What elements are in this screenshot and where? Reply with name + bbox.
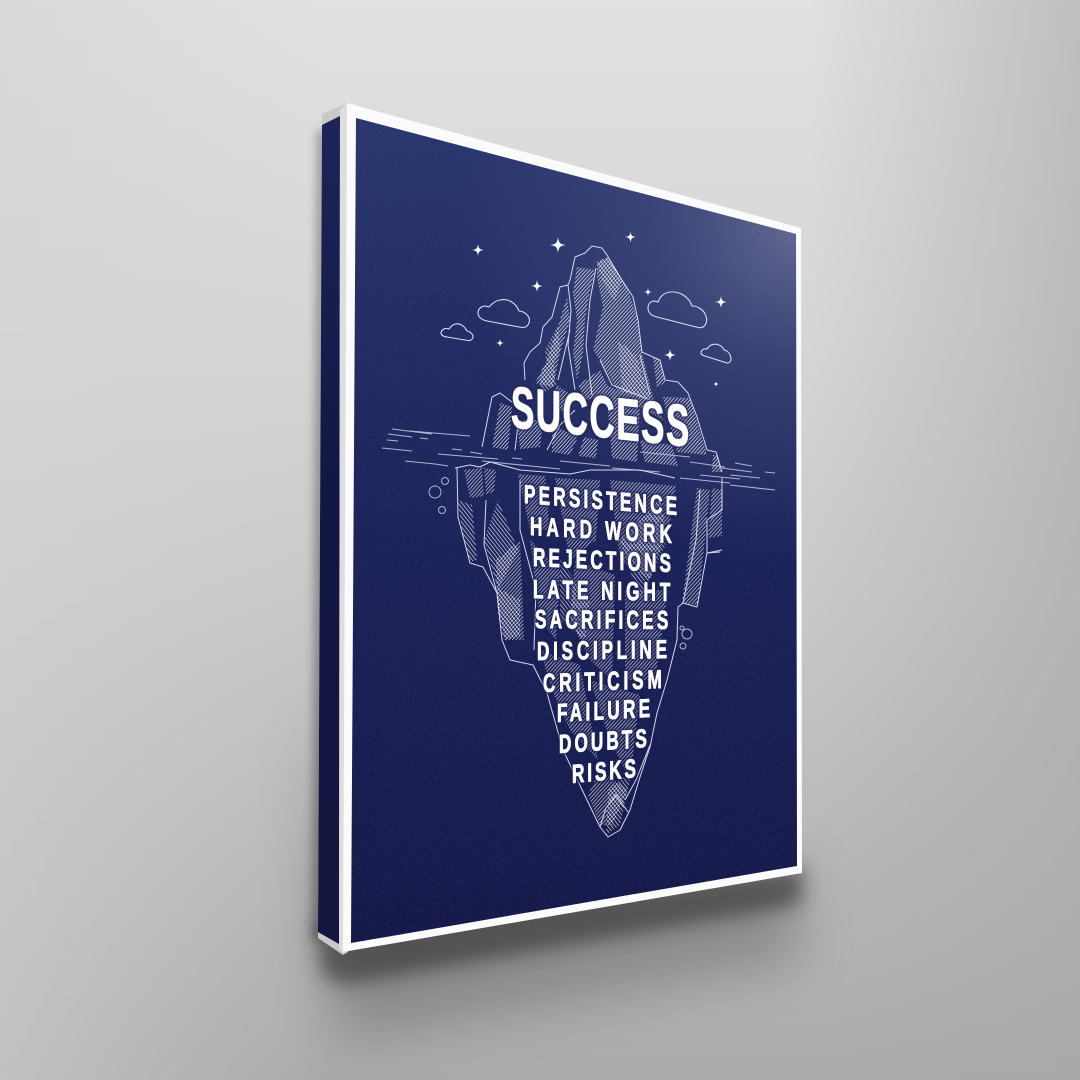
bubbles bbox=[429, 478, 692, 649]
stars bbox=[472, 232, 727, 387]
SACRIFICES: SACRIFICES bbox=[535, 604, 668, 635]
clouds bbox=[441, 292, 731, 363]
title: SUCCESS: SUCCESS bbox=[511, 376, 689, 460]
list of hidden efforts bbox=[524, 479, 677, 789]
DISCIPLINE: DISCIPLINE bbox=[537, 634, 667, 666]
LATE NIGHT: LATE NIGHT bbox=[533, 574, 671, 607]
iceberg tip contour lines bbox=[515, 268, 650, 450]
iceberg tip hatching bbox=[492, 257, 722, 472]
RISKS: RISKS bbox=[572, 753, 636, 789]
iceberg underwater contour lines bbox=[484, 480, 720, 827]
wall shadow bbox=[310, 130, 804, 1040]
iceberg tip outline bbox=[482, 246, 722, 472]
REJECTIONS: REJECTIONS bbox=[533, 542, 671, 578]
iceberg underwater hatching bbox=[458, 468, 722, 835]
FAILURE: FAILURE bbox=[557, 693, 650, 728]
HARD WORK: HARD WORK bbox=[530, 511, 672, 549]
iceberg underwater outline bbox=[457, 468, 722, 837]
iceberg bbox=[382, 246, 775, 837]
PERSISTENCE: PERSISTENCE bbox=[524, 479, 677, 521]
canvas side panel bbox=[318, 103, 348, 955]
canvas front blue print bbox=[350, 115, 800, 945]
CRITICISM: CRITICISM bbox=[543, 664, 662, 698]
water lines bbox=[382, 429, 775, 490]
canvas front frame bbox=[343, 103, 802, 952]
DOUBTS: DOUBTS bbox=[559, 723, 647, 759]
